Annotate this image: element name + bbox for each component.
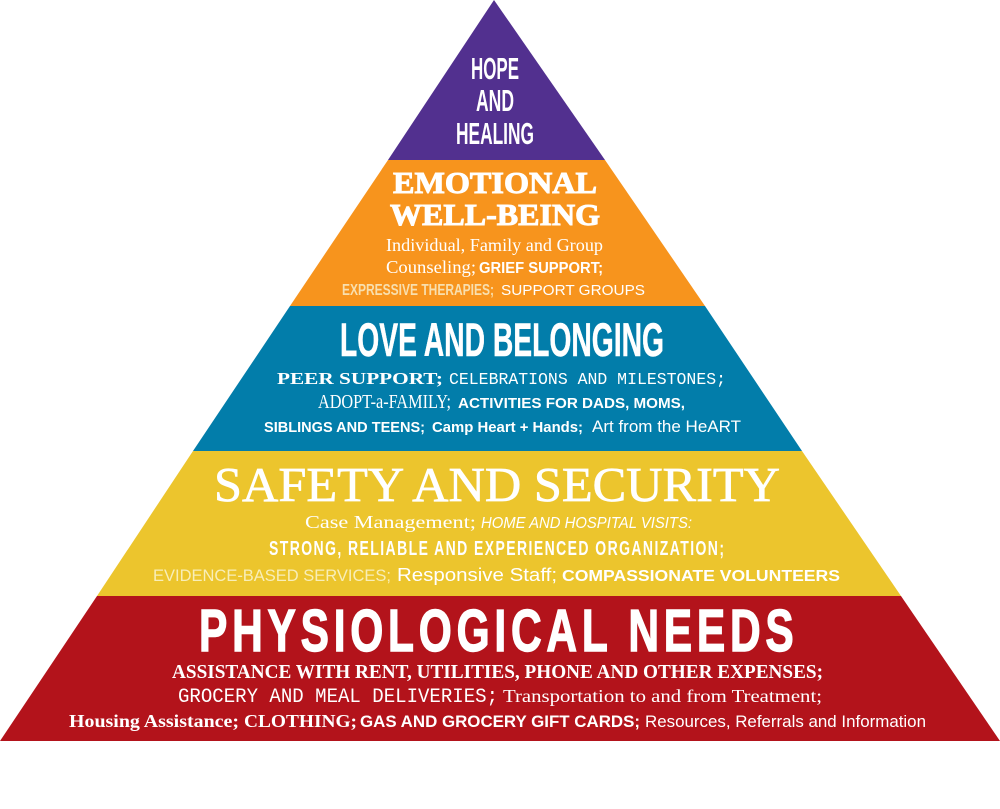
text block: physiological needs services: CLOTHING; (244, 711, 357, 731)
panel: physiological needs (0, 596, 1000, 741)
text block: safety and security services: Responsive Staff; (397, 565, 557, 585)
text block: emotional well-being services: SUPPORT GROUPS (501, 282, 645, 299)
heading: hope and healing: HEALING (456, 116, 534, 151)
heading: emotional well-being: WELL-BEING (390, 197, 600, 232)
text block: safety and security services: Case Management; (305, 512, 476, 532)
text block: physiological needs services: Resources, Referrals and Information (645, 712, 926, 731)
heading: physiological needs: PHYSIOLOGICAL NEEDS (199, 597, 794, 664)
text block: safety and security services: STRONG, RELIABLE AND EXPERIENCED ORGANIZATION; (269, 536, 724, 560)
text block: love and belonging services: ACTIVITIES FOR DADS, MOMS, (458, 395, 685, 412)
heading: emotional well-being (390, 165, 600, 232)
panel: love and belonging (193, 306, 802, 451)
text block: love and belonging services: ADOPT-a-FAMILY; (318, 391, 451, 413)
heading: love and belonging: LOVE AND BELONGING (340, 313, 664, 366)
text block: safety and security services (153, 512, 840, 585)
text block: physiological needs services: Housing Assistance; (69, 711, 239, 731)
text block: love and belonging services: Art from the HeART (592, 417, 741, 436)
text block: emotional well-being services: Individual, Family and Group (386, 235, 603, 255)
text block: physiological needs services (69, 661, 926, 731)
text block: physiological needs services: GROCERY AND MEAL DELIVERIES; (178, 686, 498, 709)
heading: emotional well-being: EMOTIONAL (393, 165, 597, 200)
text block: safety and security services: HOME AND HOSPITAL VISITS: (481, 515, 692, 532)
text block: emotional well-being services: GRIEF SUPPORT; (479, 260, 603, 277)
panel: hope and healing (388, 0, 605, 160)
text block: physiological needs services: GAS AND GROCERY GIFT CARDS; (360, 712, 640, 731)
text block: physiological needs services: ASSISTANCE WITH RENT, UTILITIES, PHONE AND OTHER EXPENSES; (172, 661, 823, 683)
text block: love and belonging services: SIBLINGS AND TEENS; (264, 419, 425, 436)
text block: physiological needs services: Transportation to and from Treatment; (503, 686, 822, 706)
heading: hope and healing (456, 51, 534, 151)
text block: emotional well-being services: EXPRESSIVE THERAPIES; (342, 282, 494, 299)
text block: emotional well-being services (342, 235, 645, 299)
text block: safety and security services: EVIDENCE-BASED SERVICES; (153, 566, 391, 585)
text block: love and belonging services: PEER SUPPORT; (277, 369, 443, 388)
heading: safety and security: SAFETY AND SECURITY (214, 457, 780, 512)
text block: love and belonging services: CELEBRATIONS AND MILESTONES; (449, 371, 726, 390)
text block: emotional well-being services: Counseling; (386, 257, 476, 277)
text block: love and belonging services: Camp Heart + Hands; (432, 419, 583, 436)
heading: hope and healing: AND (476, 83, 514, 118)
heading: hope and healing: HOPE (471, 51, 519, 86)
text block: love and belonging services (264, 369, 741, 436)
panel: safety and security (97, 451, 901, 596)
text block: safety and security services: COMPASSIONATE VOLUNTEERS (562, 568, 840, 585)
panel: emotional well-being (290, 160, 705, 306)
